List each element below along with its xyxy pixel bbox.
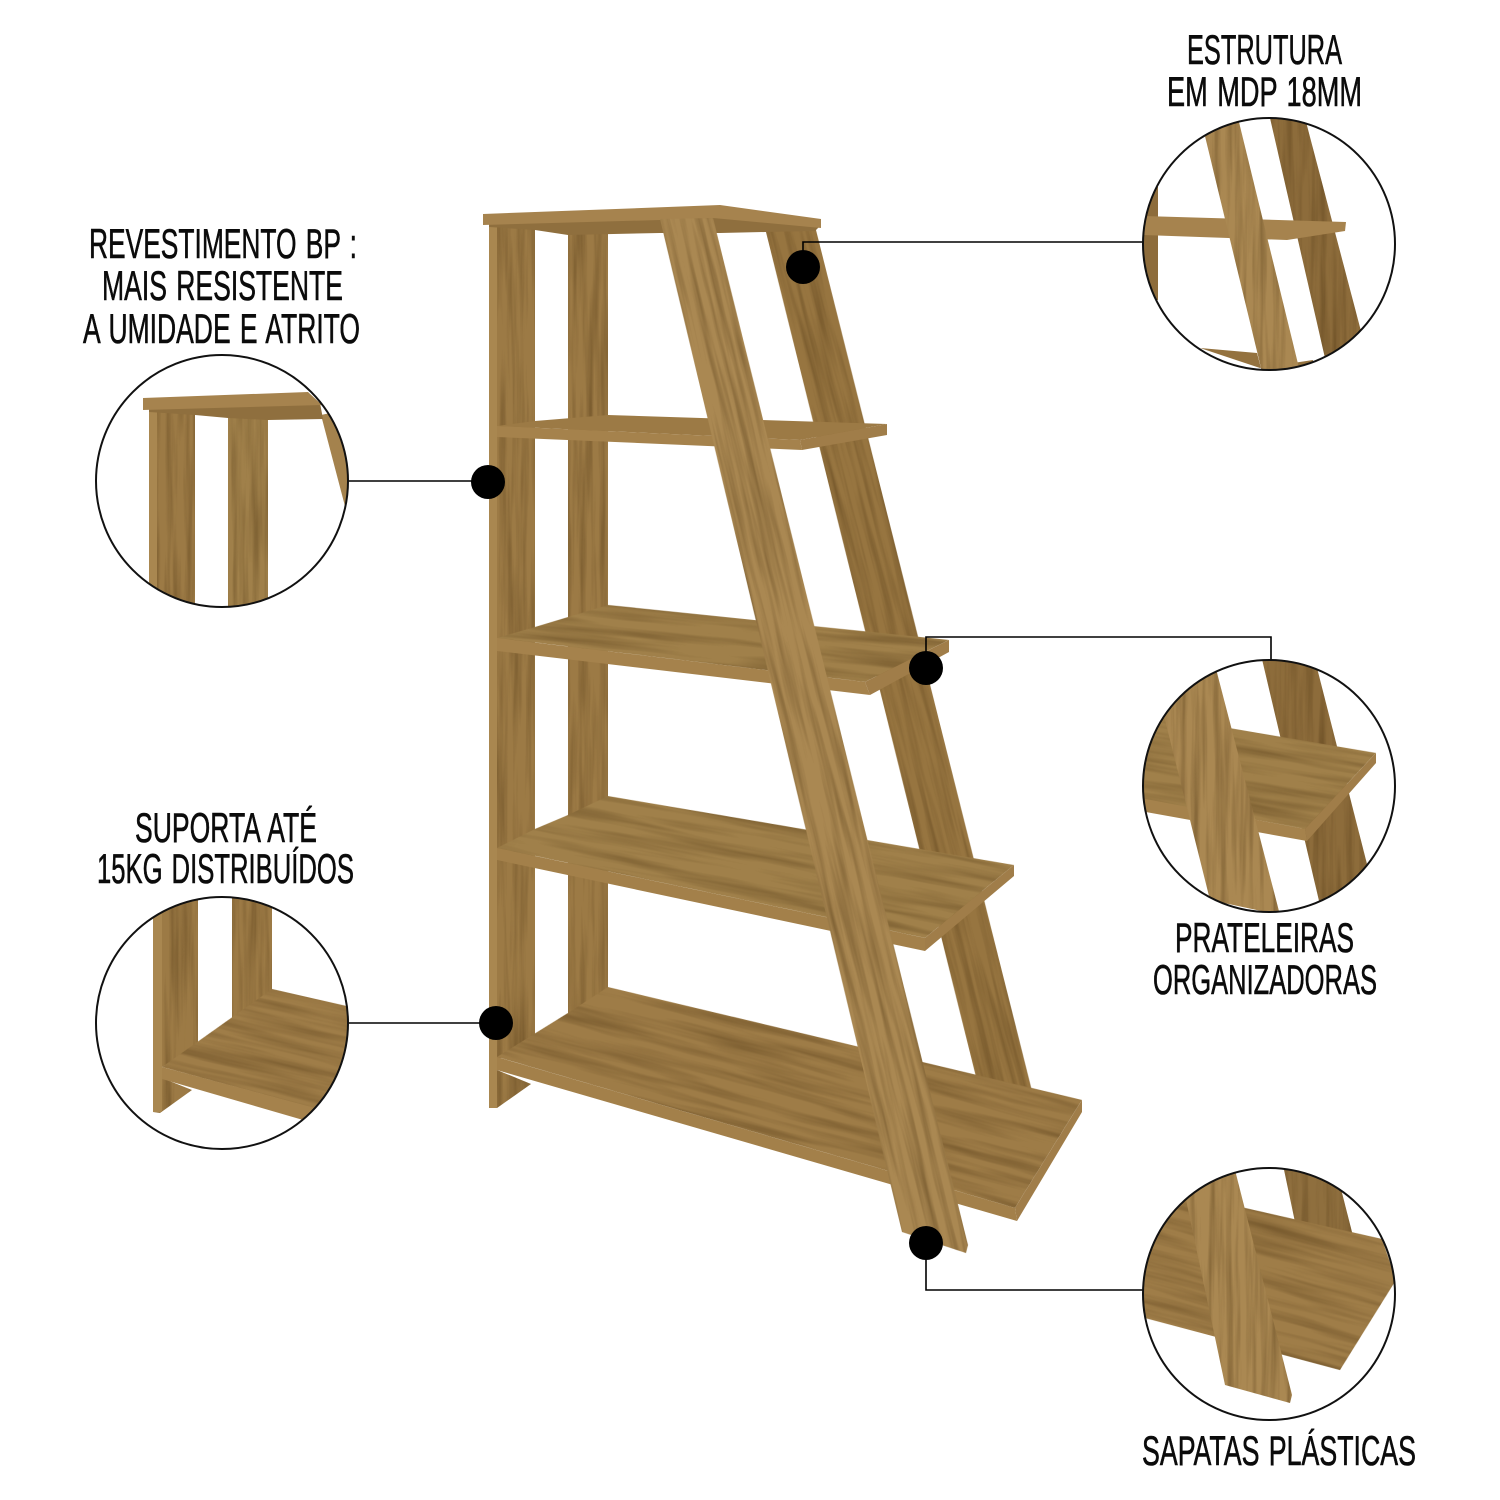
detail circle: load (95, 896, 349, 1150)
marker dot: feet (909, 1226, 943, 1260)
marker dot: structure (786, 250, 820, 284)
label: structure (1167, 26, 1362, 115)
back slanted leg (558, 162, 1240, 1159)
shelf 2 (489, 558, 957, 729)
front slanted leg (423, 148, 1205, 1323)
top board (483, 205, 821, 235)
callout line: structure (803, 242, 1143, 252)
callout line: load (348, 1022, 482, 1024)
marker dot: load (479, 1006, 513, 1040)
label: coating: REVESTIMENTO BP : (89, 220, 357, 267)
label: coating: MAIS RESISTENTE (102, 262, 343, 309)
label: shelves (1153, 914, 1377, 1003)
detail circle: feet (1142, 1167, 1396, 1421)
label: coating (83, 220, 360, 352)
marker dot: shelves (909, 651, 943, 685)
shelf unit (423, 148, 1240, 1354)
second vertical post (568, 228, 608, 1023)
label: shelves: PRATELEIRAS (1175, 914, 1354, 961)
marker dot: coating (471, 465, 505, 499)
callout line: shelves (926, 637, 1271, 660)
shelf 4 (bottom) (442, 841, 1137, 1354)
label: load: SUPORTA ATÉ (135, 804, 317, 851)
callout line: coating (348, 480, 474, 482)
shelf 1 (497, 415, 887, 450)
label: load: 15KG DISTRIBUÍDOS (97, 845, 354, 892)
label: load (97, 804, 354, 892)
label: coating: A UMIDADE E ATRITO (83, 305, 360, 352)
detail circle: coating (96, 355, 352, 608)
left vertical post (489, 224, 535, 1108)
detail circle: structure (1143, 118, 1395, 372)
callout line: feet (926, 1258, 1143, 1290)
shelf 3 (470, 699, 1041, 1035)
detail circle: shelves (1142, 659, 1396, 913)
label: structure: ESTRUTURA (1187, 26, 1342, 73)
label: structure: EM MDP 18MM (1167, 68, 1362, 115)
